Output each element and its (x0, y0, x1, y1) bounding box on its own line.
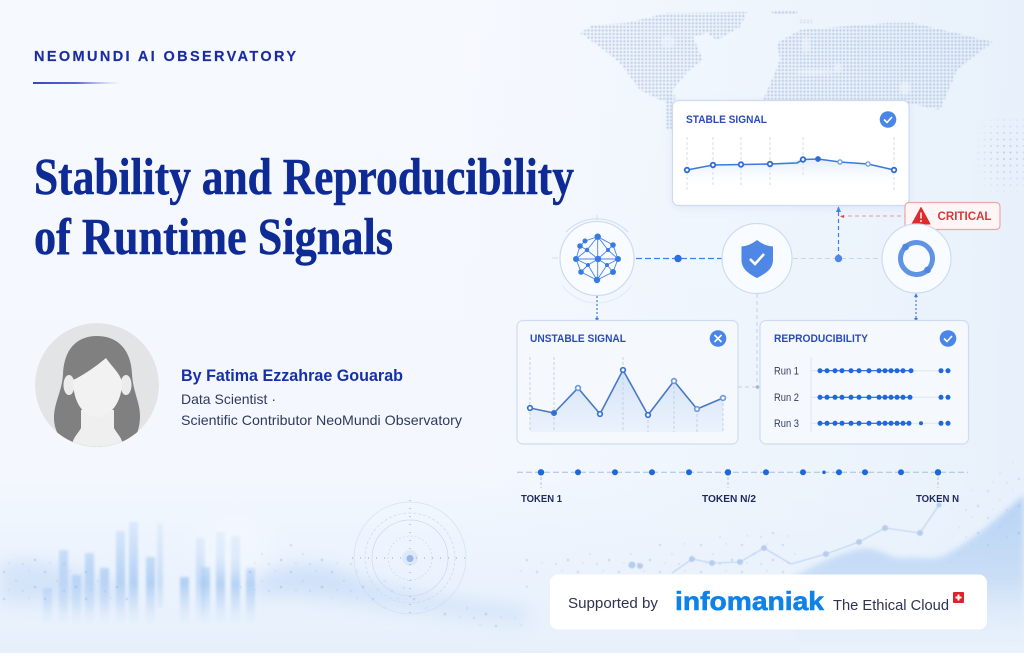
icon: reproducibility check (940, 330, 956, 347)
icon: warning triangle (912, 208, 930, 224)
heading: reproducibility: REPRODUCIBILITY (774, 333, 869, 345)
token labels: TOKEN N (916, 494, 959, 505)
infomaniak logo: infomaniak (675, 586, 825, 616)
icon: unstable cross (710, 330, 726, 347)
sponsor card (550, 574, 987, 630)
panel: stable signal (672, 100, 909, 206)
run 3 (774, 418, 950, 430)
supported by: Supported by (568, 595, 659, 612)
title (34, 149, 574, 266)
token labels: TOKEN N/2 (702, 494, 756, 505)
heading: stable signal: STABLE SIGNAL (686, 114, 767, 126)
icon: swiss flag (953, 592, 964, 603)
dotted world map (580, 10, 993, 130)
panel: unstable signal (517, 320, 738, 444)
title: of Runtime Signals (34, 209, 393, 266)
panel: reproducibility (760, 320, 968, 444)
callout: critical (905, 202, 1000, 230)
token labels: TOKEN 1 (521, 494, 562, 505)
run 1 (774, 366, 950, 378)
connector lines (595, 206, 918, 389)
run 1: Run 1 (774, 366, 799, 378)
run 2: Run 2 (774, 392, 799, 404)
node: reproducibility loop (882, 224, 951, 293)
run 3: Run 3 (774, 418, 799, 430)
side dot field (978, 119, 1024, 192)
tagline: The Ethical Cloud (833, 597, 949, 614)
icon: stable check (880, 111, 896, 128)
label: NeoMundi AI Observatory: NEOMUNDI AI OBSERVATORY (34, 49, 296, 65)
token timeline (517, 469, 968, 505)
callout: critical: CRITICAL (938, 209, 992, 223)
bottom left bar chart backdrop (43, 522, 255, 626)
title: Stability and Reproducibility (34, 149, 574, 206)
token labels (521, 494, 959, 505)
avatar (35, 323, 159, 447)
accent rule (33, 82, 121, 84)
radar circles (352, 500, 468, 616)
author name: By Fatima Ezzahrae Gouarab (181, 367, 403, 385)
line chart: unstable (528, 357, 725, 432)
node: neural network (552, 215, 634, 303)
right blue mountain (520, 450, 1024, 653)
author role: Data Scientist · (181, 391, 276, 407)
author role (181, 391, 462, 428)
flowing data wave (0, 515, 530, 636)
node: shield (722, 224, 792, 294)
heading: unstable signal: UNSTABLE SIGNAL (530, 333, 626, 345)
network line with nodes (629, 503, 941, 573)
run 2 (774, 392, 950, 404)
line chart: stable (685, 137, 896, 192)
author role: Scientific Contributor NeoMundi Observatory (181, 412, 462, 428)
